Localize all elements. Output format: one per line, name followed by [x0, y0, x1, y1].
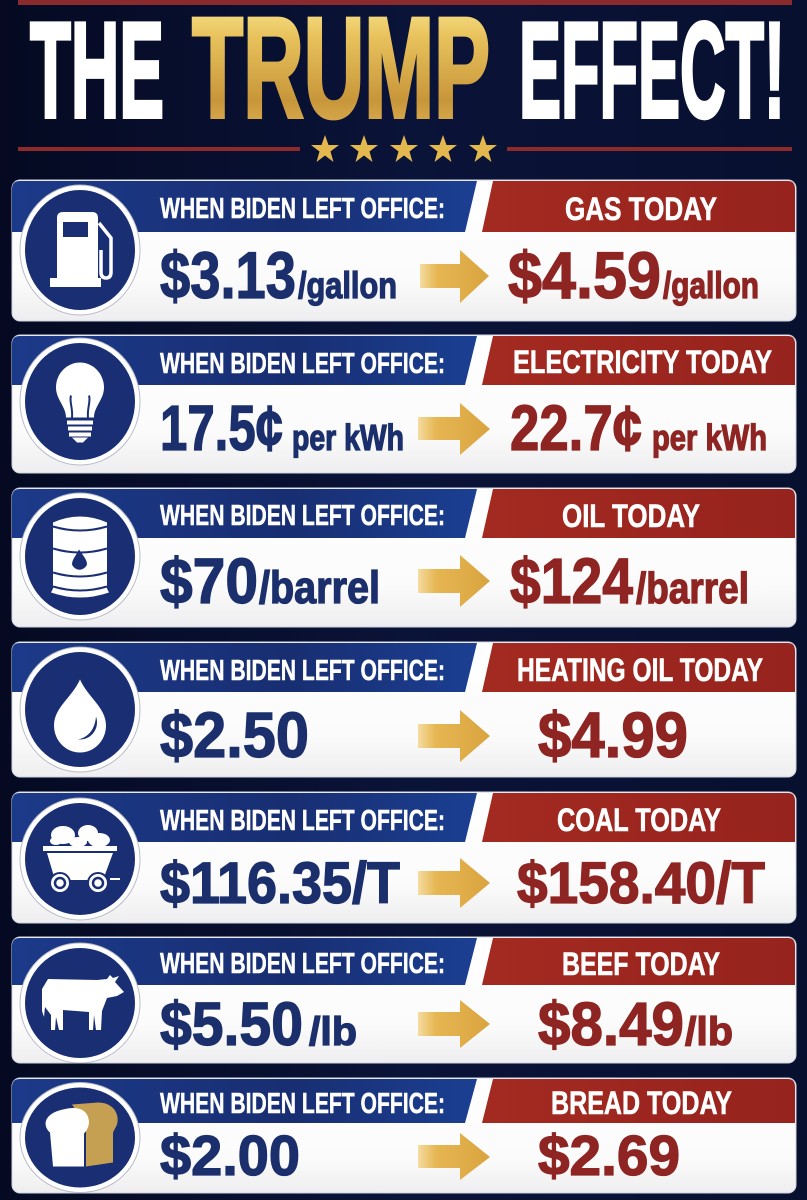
new price: $2.69: [538, 1124, 680, 1188]
panel: heating oil: [12, 642, 796, 777]
panel: coal: [12, 792, 796, 923]
old price: $5.50: [160, 990, 303, 1058]
new price: $124: [510, 545, 633, 617]
icon: coal cart: [20, 798, 140, 920]
old price: $116.35/T: [160, 851, 400, 916]
old price: 17.5¢: [160, 392, 283, 464]
icon: light bulb: [20, 338, 140, 465]
new price: 22.7¢: [510, 392, 642, 464]
title divider with five stars: [18, 135, 792, 162]
old price: $2.50: [160, 699, 309, 771]
new price: /gallon: [663, 265, 759, 306]
right label: BREAD TODAY: [551, 1085, 732, 1121]
left label: WHEN BIDEN LEFT OFFICE:: [160, 193, 445, 225]
panel: beef: [12, 937, 796, 1063]
arrow: [418, 1133, 490, 1180]
old price: per kWh: [292, 417, 404, 458]
arrow: [418, 1000, 490, 1048]
arrow: [418, 555, 490, 607]
old price: /lb: [309, 1010, 357, 1054]
old price: [160, 545, 380, 617]
left label: WHEN BIDEN LEFT OFFICE:: [160, 655, 445, 687]
right label: GAS TODAY: [565, 191, 717, 227]
left label: WHEN BIDEN LEFT OFFICE:: [160, 1088, 445, 1120]
right label: OIL TODAY: [562, 498, 700, 534]
panel: bread: [12, 1078, 796, 1193]
old price: [160, 392, 404, 464]
old price: $2.00: [160, 1124, 300, 1188]
old price: /barrel: [259, 562, 380, 613]
old price: /gallon: [298, 265, 397, 306]
icon: droplet: [20, 647, 140, 772]
icon: bread loaf: [20, 1082, 140, 1192]
icon: fuel pump: [20, 185, 140, 315]
arrow: [418, 403, 490, 455]
old price: $3.13: [160, 238, 296, 312]
arrow: [420, 250, 489, 303]
title: [30, 0, 785, 148]
old price: $70: [160, 545, 258, 617]
panel: electricity: [12, 335, 796, 473]
new price: [510, 392, 767, 464]
icon: cow: [20, 943, 140, 1063]
right label: COAL TODAY: [557, 802, 721, 838]
panel: oil: [12, 488, 796, 627]
icon: oil barrel: [20, 493, 140, 620]
left label: WHEN BIDEN LEFT OFFICE:: [160, 500, 445, 532]
arrow: [418, 858, 490, 908]
left label: WHEN BIDEN LEFT OFFICE:: [160, 948, 445, 980]
left label: WHEN BIDEN LEFT OFFICE:: [160, 348, 445, 380]
new price: [508, 238, 759, 312]
arrow: [418, 710, 490, 762]
new price: $4.99: [538, 699, 688, 771]
panel: gas: [12, 180, 796, 321]
new price: $4.59: [508, 238, 661, 312]
right label: BEEF TODAY: [562, 946, 720, 982]
left label: WHEN BIDEN LEFT OFFICE:: [160, 805, 445, 837]
new price: [510, 545, 749, 617]
new price: per kWh: [652, 417, 767, 458]
new price: /barrel: [636, 564, 749, 613]
old price: [160, 238, 397, 312]
new price: /lb: [685, 1010, 733, 1054]
new price: $8.49: [538, 990, 684, 1058]
new price: $158.40/T: [517, 851, 765, 916]
